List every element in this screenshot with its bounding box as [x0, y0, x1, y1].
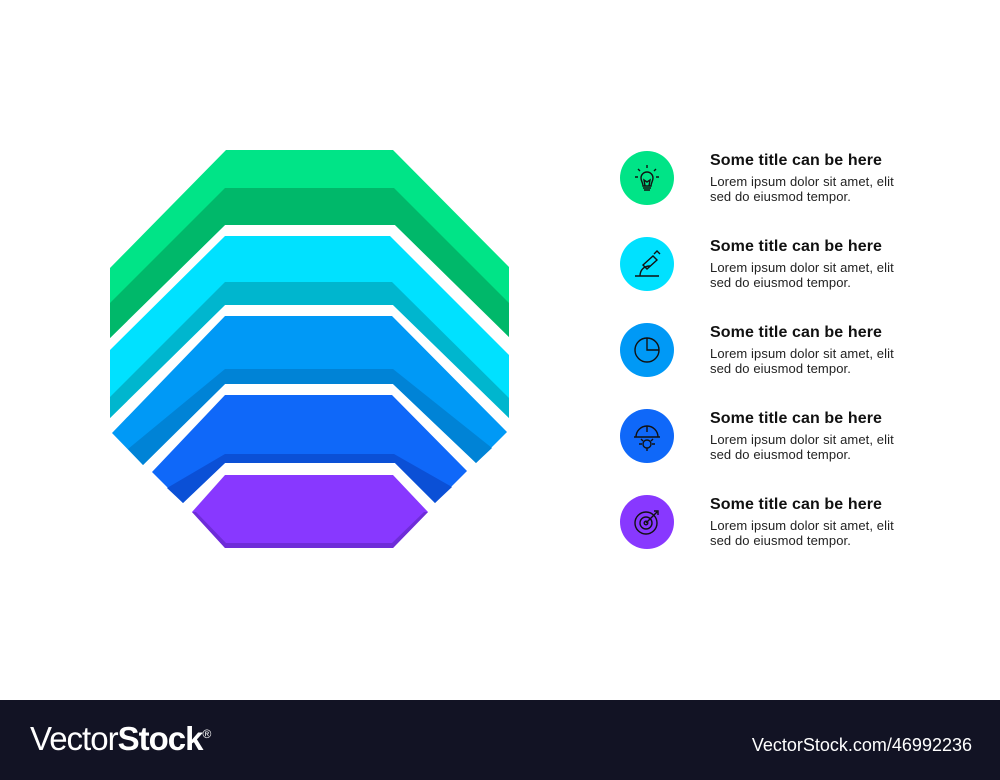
layer 3: blue	[112, 316, 507, 465]
item 1: Lorem ipsum dolor sit amet, elit	[710, 174, 894, 189]
item 4: Some title can be here	[710, 410, 882, 427]
item 3: Lorem ipsum dolor sit amet, elit	[710, 346, 894, 361]
item 1	[620, 151, 894, 205]
footer logo: VectorStock®	[30, 720, 210, 757]
item 2: Lorem ipsum dolor sit amet, elit	[710, 260, 894, 275]
icon: timer	[620, 323, 674, 377]
item 5: sed do eiusmod tempor.	[710, 532, 851, 548]
text	[710, 496, 894, 548]
item 1: sed do eiusmod tempor.	[710, 188, 851, 204]
item 4: sed do eiusmod tempor.	[710, 446, 851, 462]
item 2	[620, 237, 894, 291]
item 4	[620, 409, 894, 463]
item 3: sed do eiusmod tempor.	[710, 360, 851, 376]
layer 2: cyan	[110, 236, 509, 418]
text	[710, 238, 894, 290]
item 1: Some title can be here	[710, 152, 882, 169]
item 2: sed do eiusmod tempor.	[710, 274, 851, 290]
item 4: Lorem ipsum dolor sit amet, elit	[710, 432, 894, 447]
item 3	[620, 323, 894, 377]
layer 1: green	[110, 150, 509, 338]
text	[710, 410, 894, 462]
text	[710, 152, 894, 204]
item 3: Some title can be here	[710, 324, 882, 341]
item 5	[620, 495, 894, 549]
text	[710, 324, 894, 376]
footer	[0, 700, 1000, 780]
footer url: VectorStock.com/46992236	[752, 735, 972, 755]
icon: microscope	[620, 237, 674, 291]
layer 5: purple	[192, 475, 428, 548]
layer 4: dark blue	[152, 395, 467, 503]
icon: helmet gear	[620, 409, 674, 463]
icon: lightbulb	[620, 151, 674, 205]
item 5: Lorem ipsum dolor sit amet, elit	[710, 518, 894, 533]
icon: target	[620, 495, 674, 549]
item 5: Some title can be here	[710, 496, 882, 513]
item 2: Some title can be here	[710, 238, 882, 255]
